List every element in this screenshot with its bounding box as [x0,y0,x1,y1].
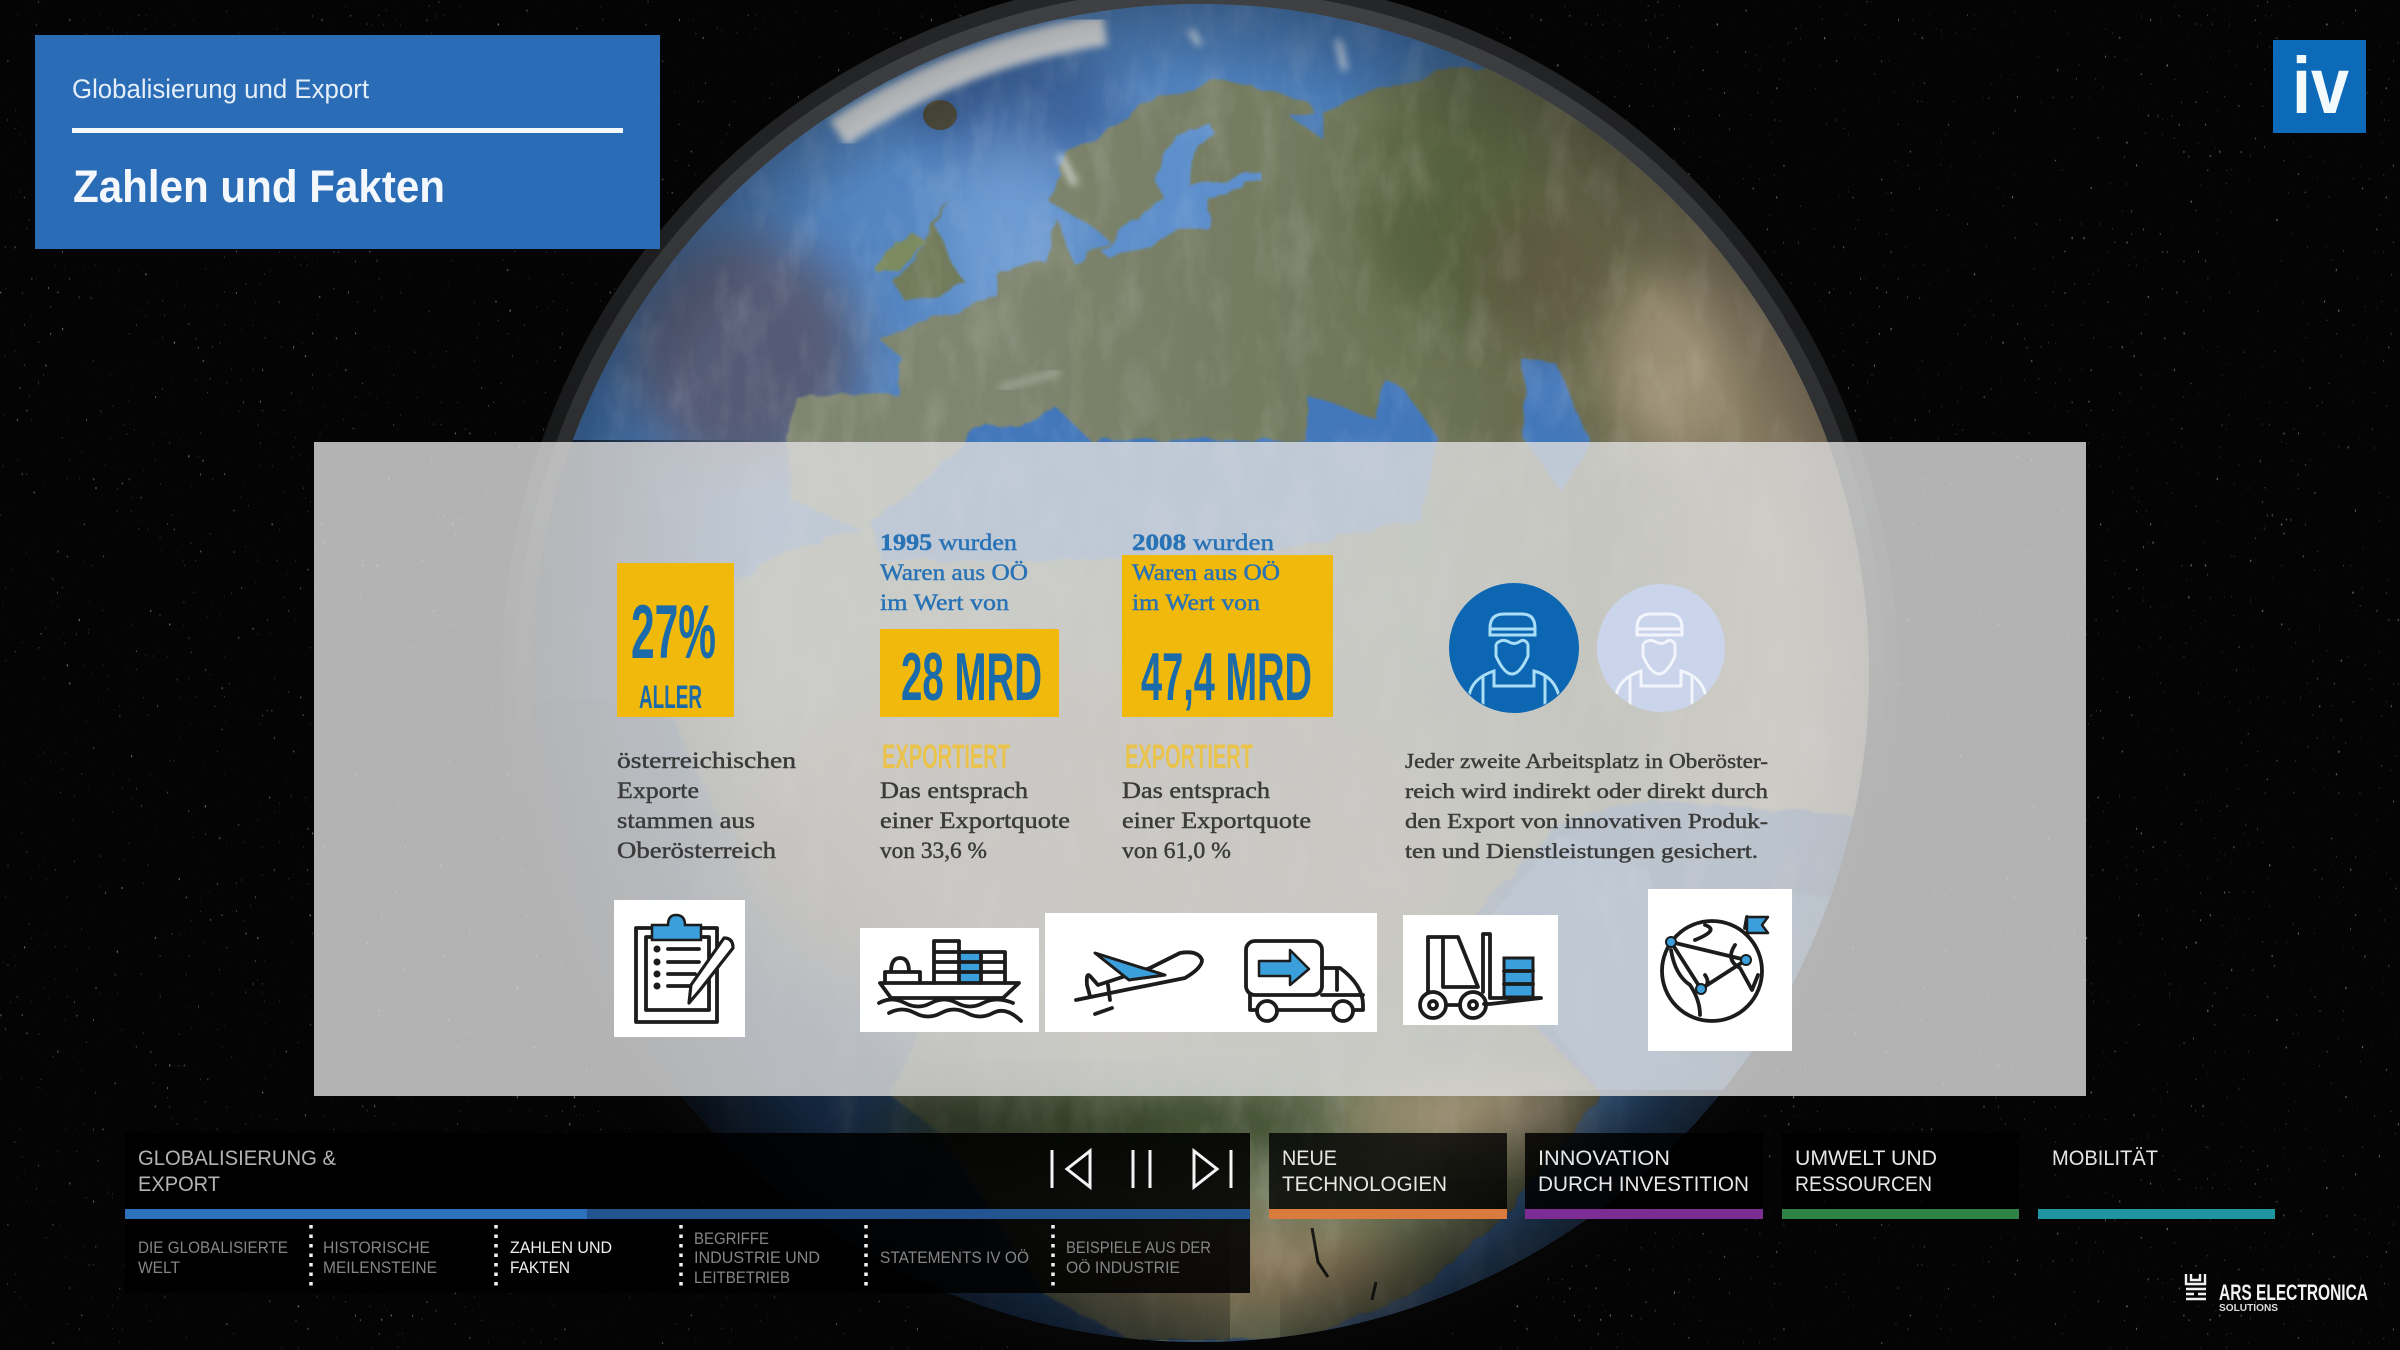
icon: clipboard [614,900,745,1037]
tab: umwelt: UMWELT UND [1795,1147,1937,1170]
icon: plane and truck [1045,913,1377,1032]
logo: ars electronica: SOLUTIONS [2219,1303,2278,1314]
tab: neue technologien: NEUE [1282,1147,1337,1170]
sub navigation labels: HISTORISCHE [323,1238,430,1257]
icon: worker light [1597,584,1725,712]
logo: iv: iv [2292,41,2349,130]
stat: 2008: Waren aus OÖ [1132,560,1280,585]
text: austrian exports: Oberösterreich [617,838,777,863]
tab: umwelt [1782,1133,2019,1219]
text: jobs: reich wird indirekt oder direkt durch [1405,779,1769,803]
stat: 1995: von 33,6 % [880,838,987,863]
stat: 1995 [880,530,1070,863]
mediterranean, black sea, caspian [870,360,1590,560]
stat: 2008: einer Exportquote [1122,808,1311,833]
section label: Globalisierung und Export [72,74,369,104]
sub navigation labels: INDUSTRIE UND [694,1248,820,1267]
stat: 1995: einer Exportquote [880,808,1070,833]
navigation: current chapter: GLOBALISIERUNG & [138,1147,336,1170]
text: jobs: den Export von innovativen Produk- [1405,809,1768,833]
text: austrian exports: österreichischen [617,748,797,773]
tab: innovation: INNOVATION [1538,1147,1670,1170]
british isles [895,197,966,300]
panel: facts [314,442,2086,1096]
sub navigation labels: BEISPIELE AUS DER [1066,1238,1211,1257]
sub navigation labels: BEGRIFFE [694,1229,769,1248]
stat: 27%: ALLER [639,679,702,715]
sub navigation labels: ZAHLEN UND [510,1238,612,1257]
stat: 2008: im Wert von [1132,590,1261,615]
tab: mobilitaet: MOBILITÄT [2052,1147,2158,1170]
rift lakes [1312,1228,1376,1300]
night side shadows [530,440,760,1340]
land: eurasia and africa [650,67,1900,1340]
iceland [923,100,957,130]
sub navigation labels: WELT [138,1258,180,1277]
tab: innovation [1525,1133,1763,1219]
stat: 1995: im Wert von [880,590,1010,615]
ireland [877,233,925,273]
stat: 2008 [1122,530,1333,863]
icon: forklift [1403,915,1558,1025]
stat: 1995: EXPORTIERT [882,738,1010,776]
sub navigation labels: DIE GLOBALISIERTE [138,1238,288,1257]
arabian sea and indian ocean [1326,901,1829,1330]
tab: umwelt: RESSOURCEN [1795,1173,1932,1196]
stat: 2008: 47,4 MRD [1141,639,1312,715]
cloud streaks [612,6,1777,1304]
sub navigation labels: FAKTEN [510,1258,570,1277]
stat: 27%: 27% [631,590,716,675]
globe [502,0,1900,1350]
text: jobs: Jeder zweite Arbeitsplatz in Oberöster- [1405,749,1768,773]
text: jobs [1405,749,1769,863]
tonal patches on land [1360,85,1550,325]
stat: 27% [617,563,734,717]
icon: pause [1133,1150,1150,1188]
text: jobs: ten und Dienstleistungen gesichert. [1405,839,1758,863]
icon: previous [1052,1150,1090,1188]
separators [311,1225,1053,1288]
text: austrian exports [617,748,797,863]
icon: next [1194,1150,1231,1188]
heading: Zahlen und Fakten [73,161,445,212]
title panel [35,35,660,249]
stat: 1995: 1995 wurden [880,530,1018,555]
stat: 2008: von 61,0 % [1122,838,1231,863]
sub navigation labels: OÖ INDUSTRIE [1066,1258,1180,1277]
navigation: current chapter: EXPORT [138,1173,220,1196]
logo: ars electronica [2186,1274,2368,1314]
polar ice along limb [838,30,1105,133]
stat: 1995: Das entsprach [880,778,1029,803]
progress bar [125,1209,1250,1219]
stat: 1995: Waren aus OÖ [880,560,1028,585]
snow: alps and scandes [1060,30,1345,185]
tab: neue technologien [1269,1133,1507,1219]
logo: iv [2273,40,2366,133]
sub navigation labels: MEILENSTEINE [323,1258,437,1277]
tab: innovation: DURCH INVESTITION [1538,1173,1749,1196]
baltic sea [1100,122,1261,258]
navigation: current chapter [125,1133,1250,1293]
sub navigation labels: LEITBETRIEB [694,1268,790,1287]
stat: 2008: 2008 wurden [1132,530,1275,555]
sub navigation labels: STATEMENTS IV OÖ [880,1248,1029,1267]
stat: 2008: EXPORTIERT [1125,738,1253,776]
stat: 1995: 28 MRD [901,639,1042,715]
text: austrian exports: stammen aus [617,808,755,833]
tab: neue technologien: TECHNOLOGIEN [1282,1173,1447,1196]
ocean tones [905,45,1125,165]
sub navigation labels [138,1229,1211,1287]
icon: container ship [860,928,1039,1032]
icon: worker dark [1449,583,1579,713]
text: austrian exports: Exporte [617,778,699,803]
icon: network globe [1648,889,1792,1051]
tab: mobilitaet [2038,1147,2275,1219]
stat: 2008: Das entsprach [1122,778,1271,803]
